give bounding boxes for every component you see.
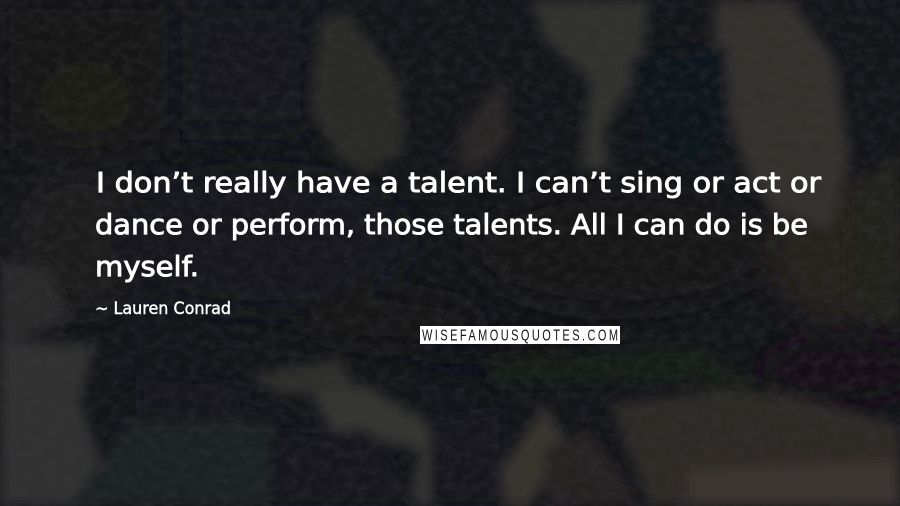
quote text — [95, 166, 822, 283]
quote line 3: myself. — [95, 250, 199, 283]
watermark badge: WISEFAMOUSQUOTES.COM — [422, 327, 618, 344]
author attribution: ~ Lauren Conrad — [95, 299, 231, 319]
left cloud — [0, 340, 115, 506]
quote line 1: I don’t really have a talent. I can’t sing or act or — [96, 166, 822, 199]
upper ridges — [310, 10, 405, 175]
lower ridges — [250, 358, 355, 395]
quote line 2: dance or perform, those talents. All I can do is be — [95, 208, 808, 241]
